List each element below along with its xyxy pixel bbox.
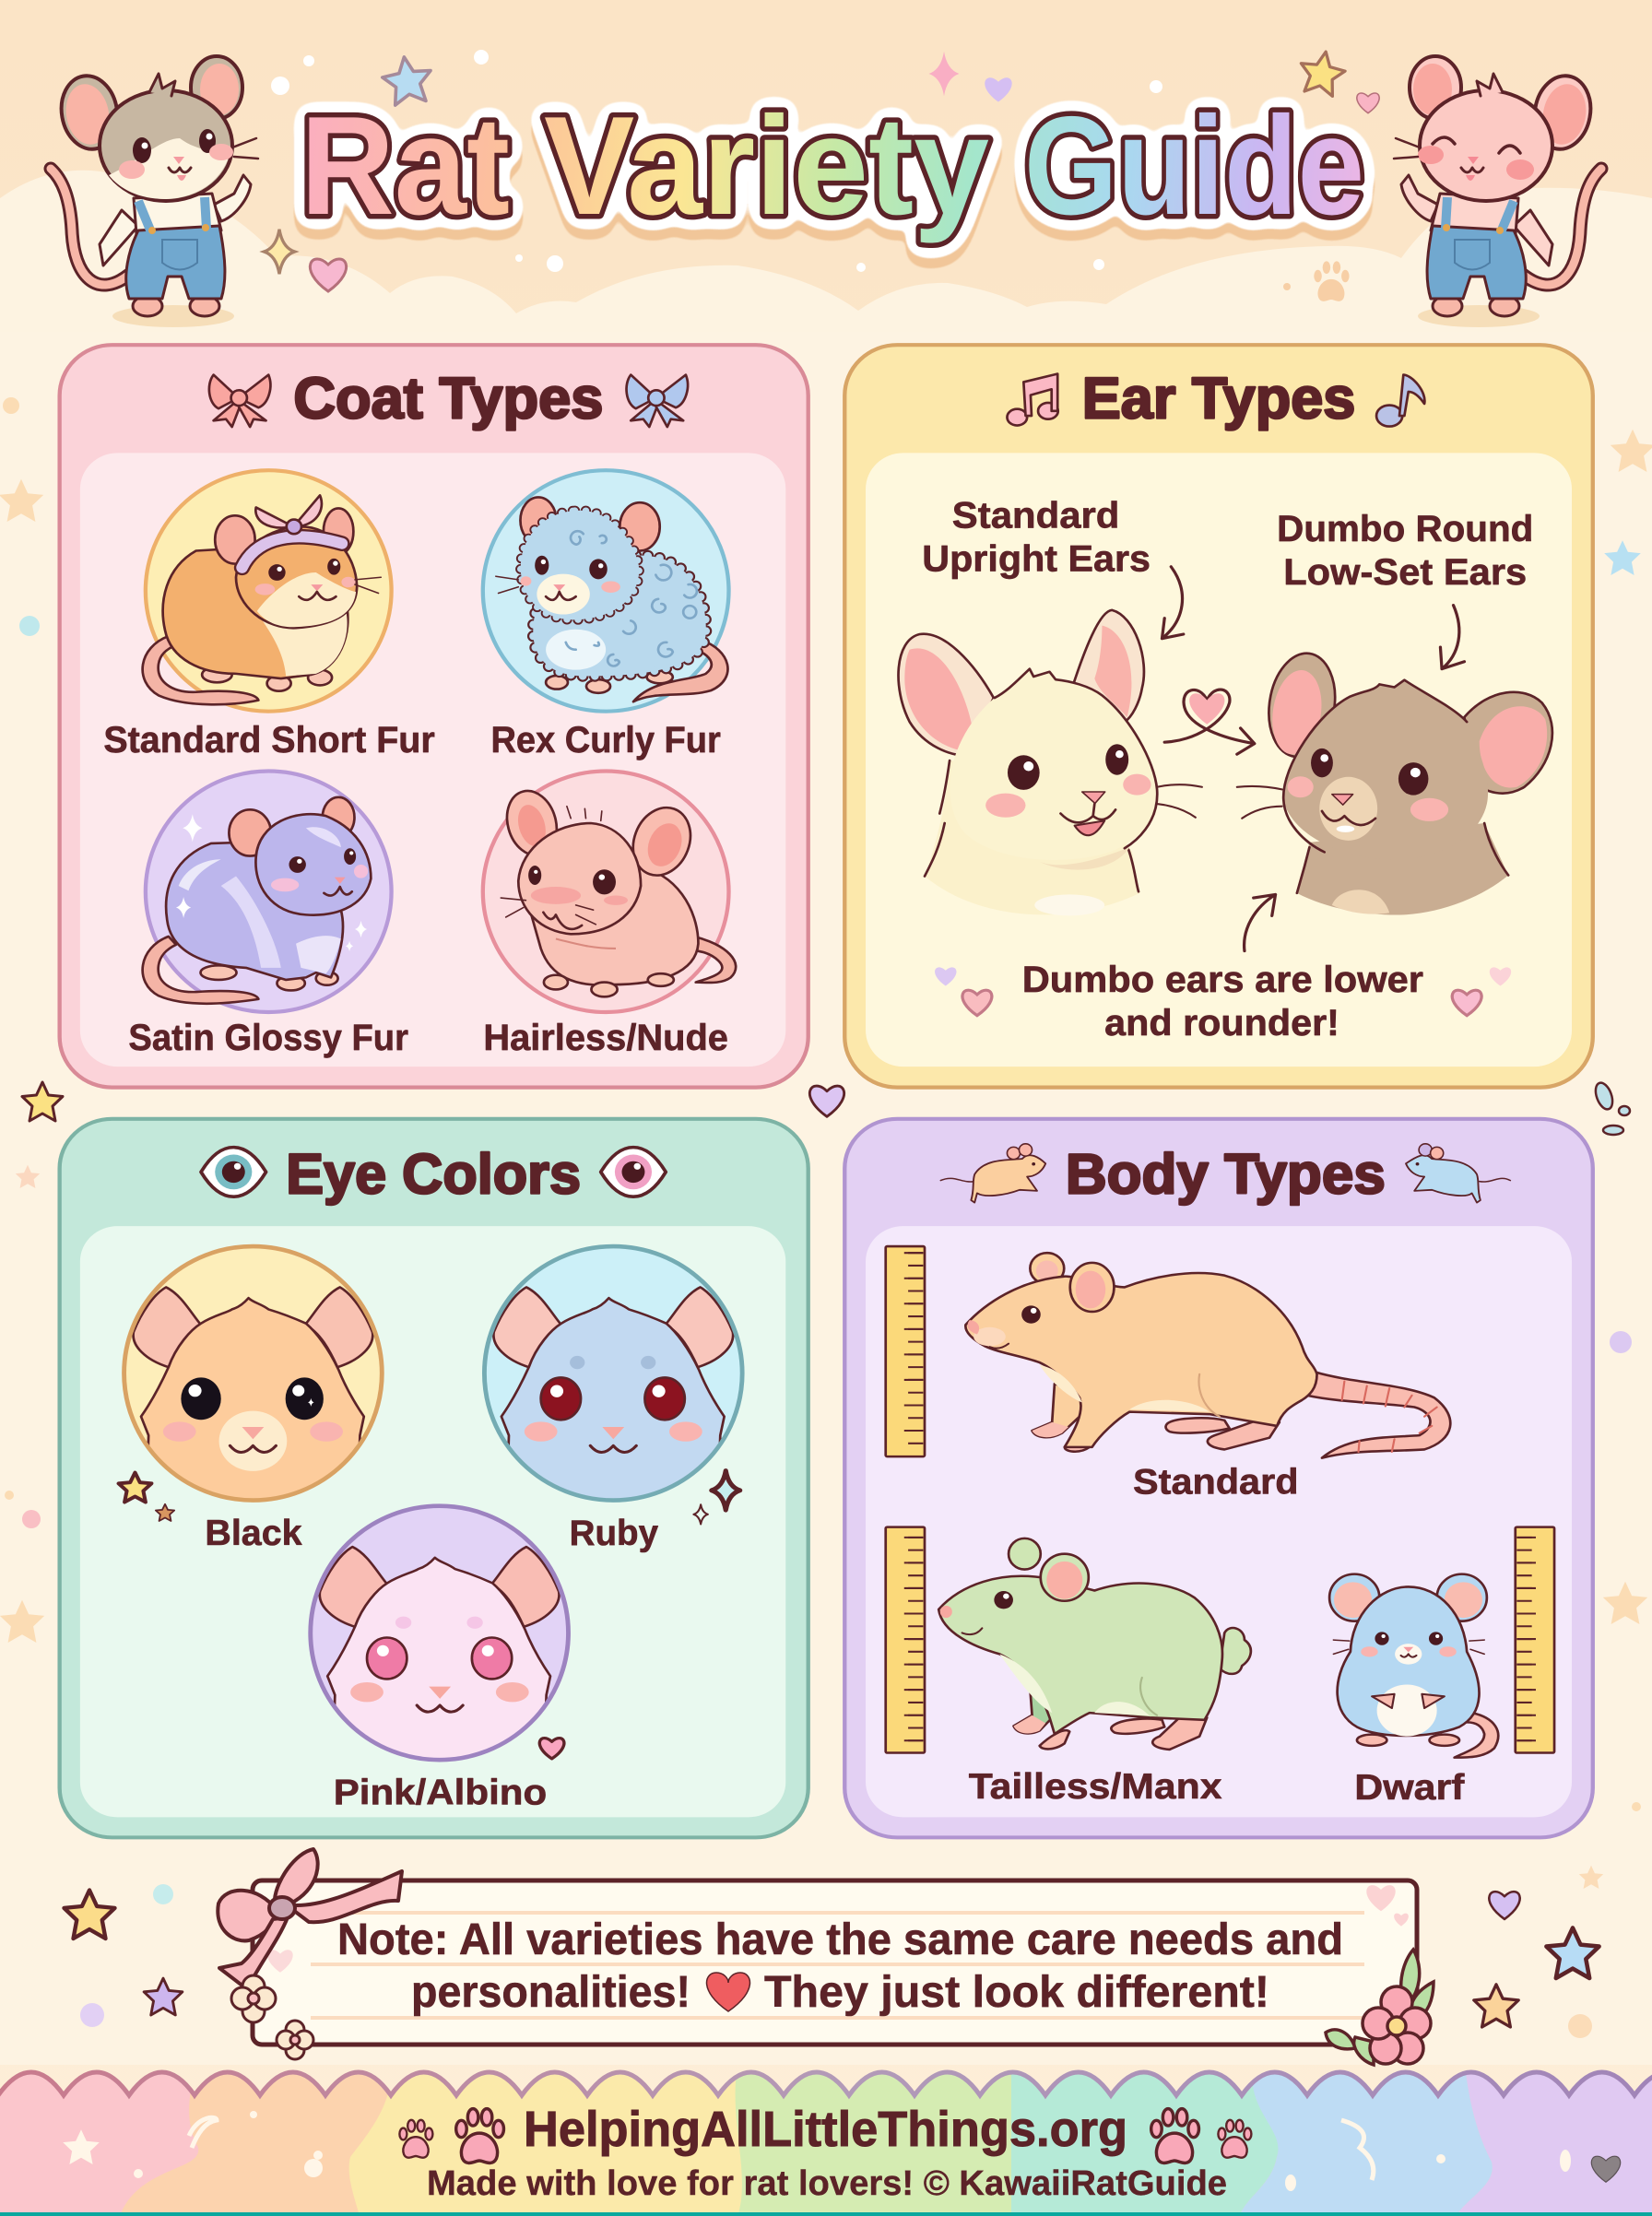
circle: rex curly fur	[483, 470, 729, 712]
tail	[51, 169, 129, 285]
rat: standard body	[965, 1253, 1450, 1458]
icon: single music note	[1376, 375, 1424, 427]
labels: ear callouts: Low-Set Ears	[1283, 551, 1527, 593]
heading: eye colors: Eye Colors	[286, 1143, 581, 1206]
icon: teal eye	[201, 1148, 266, 1196]
heading: coat types: Coat Types	[293, 366, 603, 430]
title: Variety	[544, 88, 989, 244]
note decorations	[65, 1866, 1603, 2038]
bottom strip	[0, 2212, 1652, 2216]
note: dumbo ears: Dumbo ears are lower	[1022, 959, 1423, 1000]
note: dumbo ears	[1022, 959, 1423, 1043]
note text: Note: All varieties have the same care needs and	[337, 1915, 1343, 1964]
arrow: dumbo note	[1245, 894, 1276, 951]
callout: note box	[253, 1880, 1417, 2045]
labels: ear callouts: Upright Ears	[922, 537, 1150, 579]
lower page background	[0, 332, 1652, 2065]
ruler: dwarf	[1516, 1527, 1554, 1753]
rat: standard upright ears	[899, 610, 1202, 915]
decorations: stars and sparkles	[119, 1471, 740, 1759]
panel: eye colors	[60, 1119, 808, 1837]
small flowers	[231, 1975, 313, 2059]
arrow: to dumbo ears	[1440, 606, 1464, 669]
labels: body types	[969, 1462, 1465, 1808]
heading: body types: Body Types	[1066, 1143, 1386, 1206]
circle: hairless nude	[483, 772, 736, 1012]
panel: coat types	[60, 345, 808, 1088]
icon: running mouse orange	[940, 1144, 1045, 1203]
icon: pink eye	[601, 1148, 666, 1196]
footer website: HelpingAllLittleThings.org	[524, 2102, 1127, 2157]
big flower with leaves	[1326, 1950, 1434, 2065]
rat: dwarf	[1329, 1574, 1498, 1758]
mouse mascot left	[51, 56, 258, 327]
icon: blue bow	[627, 375, 688, 427]
labels: eye colors: Pink/Albino	[334, 1774, 547, 1812]
corner watermark	[1591, 2156, 1621, 2182]
icon: red heart	[707, 1973, 749, 2011]
panel: body types	[844, 1119, 1593, 1837]
circle: ruby eyes	[484, 1246, 742, 1520]
rat: dumbo low-set ears	[1237, 649, 1552, 914]
callout: note box: They just look different!	[764, 1968, 1269, 2017]
labels: coat types: Satin Glossy Fur	[128, 1016, 408, 1058]
labels: body types: Dwarf	[1354, 1768, 1465, 1808]
callout: note box: personalities!	[411, 1968, 690, 2017]
cream cloud band in header	[0, 171, 1652, 442]
labels: coat types: Hairless/Nude	[483, 1016, 728, 1058]
ruler: tailless	[886, 1527, 925, 1753]
header sparkles	[264, 48, 1379, 301]
labels: ear callouts	[922, 494, 1533, 593]
circle: pink albino eyes	[311, 1506, 568, 1780]
labels: coat types: Rex Curly Fur	[490, 719, 721, 760]
circle: standard short fur	[143, 470, 392, 712]
footer band	[0, 2065, 1652, 2216]
icon: double music note	[1007, 374, 1058, 426]
icon: running mouse blue	[1406, 1144, 1510, 1203]
title: Rat	[301, 88, 510, 244]
mouse mascot right	[1394, 56, 1601, 327]
ears	[56, 71, 123, 154]
circle: satin glossy fur	[143, 772, 392, 1012]
title	[301, 88, 1364, 244]
icon: pink bow	[209, 375, 270, 427]
labels: coat types: Standard Short Fur	[103, 719, 435, 760]
labels: ear callouts: Standard	[952, 494, 1119, 536]
paw icons	[399, 2109, 1251, 2163]
icon: heart arrow between rats	[1164, 690, 1255, 754]
labels: eye colors: Black	[205, 1514, 302, 1553]
title: Guide	[1024, 88, 1364, 244]
heading: ear types: Ear Types	[1082, 366, 1355, 430]
note: dumbo ears: and rounder!	[1104, 1002, 1339, 1043]
circle: black eyes	[124, 1246, 382, 1520]
labels: body types: Tailless/Manx	[969, 1767, 1222, 1807]
panel: ear types	[844, 345, 1593, 1088]
footer credit: Made with love for rat lovers! © KawaiiRatGuide	[427, 2164, 1227, 2203]
labels: coat types	[103, 719, 728, 1058]
labels: body types: Standard	[1133, 1462, 1298, 1502]
labels: eye colors: Ruby	[570, 1514, 659, 1553]
ruler: standard	[886, 1246, 925, 1456]
labels: eye colors	[205, 1514, 659, 1812]
ribbon bow	[218, 1849, 402, 1989]
hearts decoration	[935, 967, 1511, 1016]
head	[100, 90, 232, 201]
arrow: to upright ears	[1162, 567, 1184, 639]
labels: ear callouts: Dumbo Round	[1277, 508, 1533, 549]
background decorations: stars and dots	[0, 397, 1652, 1811]
rat: tailless manx	[938, 1538, 1251, 1750]
